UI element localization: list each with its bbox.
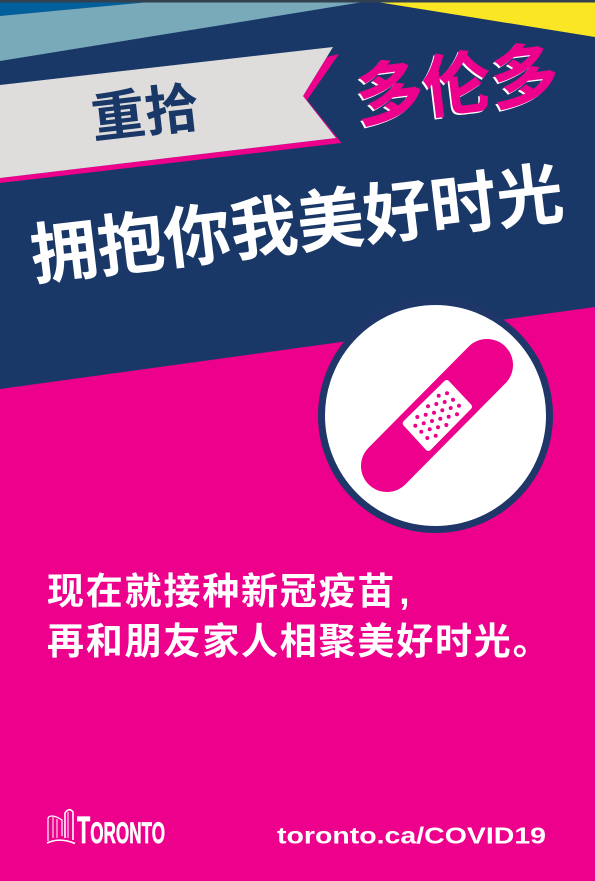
ribbon pink shadow: [0, 54, 342, 183]
bandage strip: [387, 365, 487, 466]
logo: City of Toronto: [47, 810, 165, 852]
bandage pad: [406, 383, 469, 448]
blue corner stripe: [0, 2, 144, 16]
ribbon text: 重拾: [88, 78, 202, 150]
city name pink text: 多伦多: [351, 36, 563, 136]
message line 2: 再和朋友家人相聚美好时光。: [47, 621, 551, 662]
main headline: 拥抱你我美好时光: [27, 157, 568, 294]
bandage pad dots: [413, 391, 461, 440]
teal stripe: [0, 2, 360, 61]
ribbon body: [0, 47, 336, 178]
ribbon banner: [0, 47, 342, 183]
panel: navy header band: [0, 0, 595, 389]
logo skyline icon: [47, 810, 75, 844]
icon: bandage in circle: [322, 302, 550, 530]
circle badge: [322, 302, 550, 530]
logo wordmark: TORONTO: [77, 810, 165, 852]
city name: [349, 36, 563, 138]
message line 1: 现在就接种新冠疫苗,: [47, 571, 411, 612]
city name white offset: 多伦多: [349, 38, 561, 138]
body message: [47, 571, 551, 662]
website url: toronto.ca/COVID19: [277, 822, 546, 848]
yellow corner: [380, 2, 595, 37]
top edge strip: [0, 0, 595, 2]
